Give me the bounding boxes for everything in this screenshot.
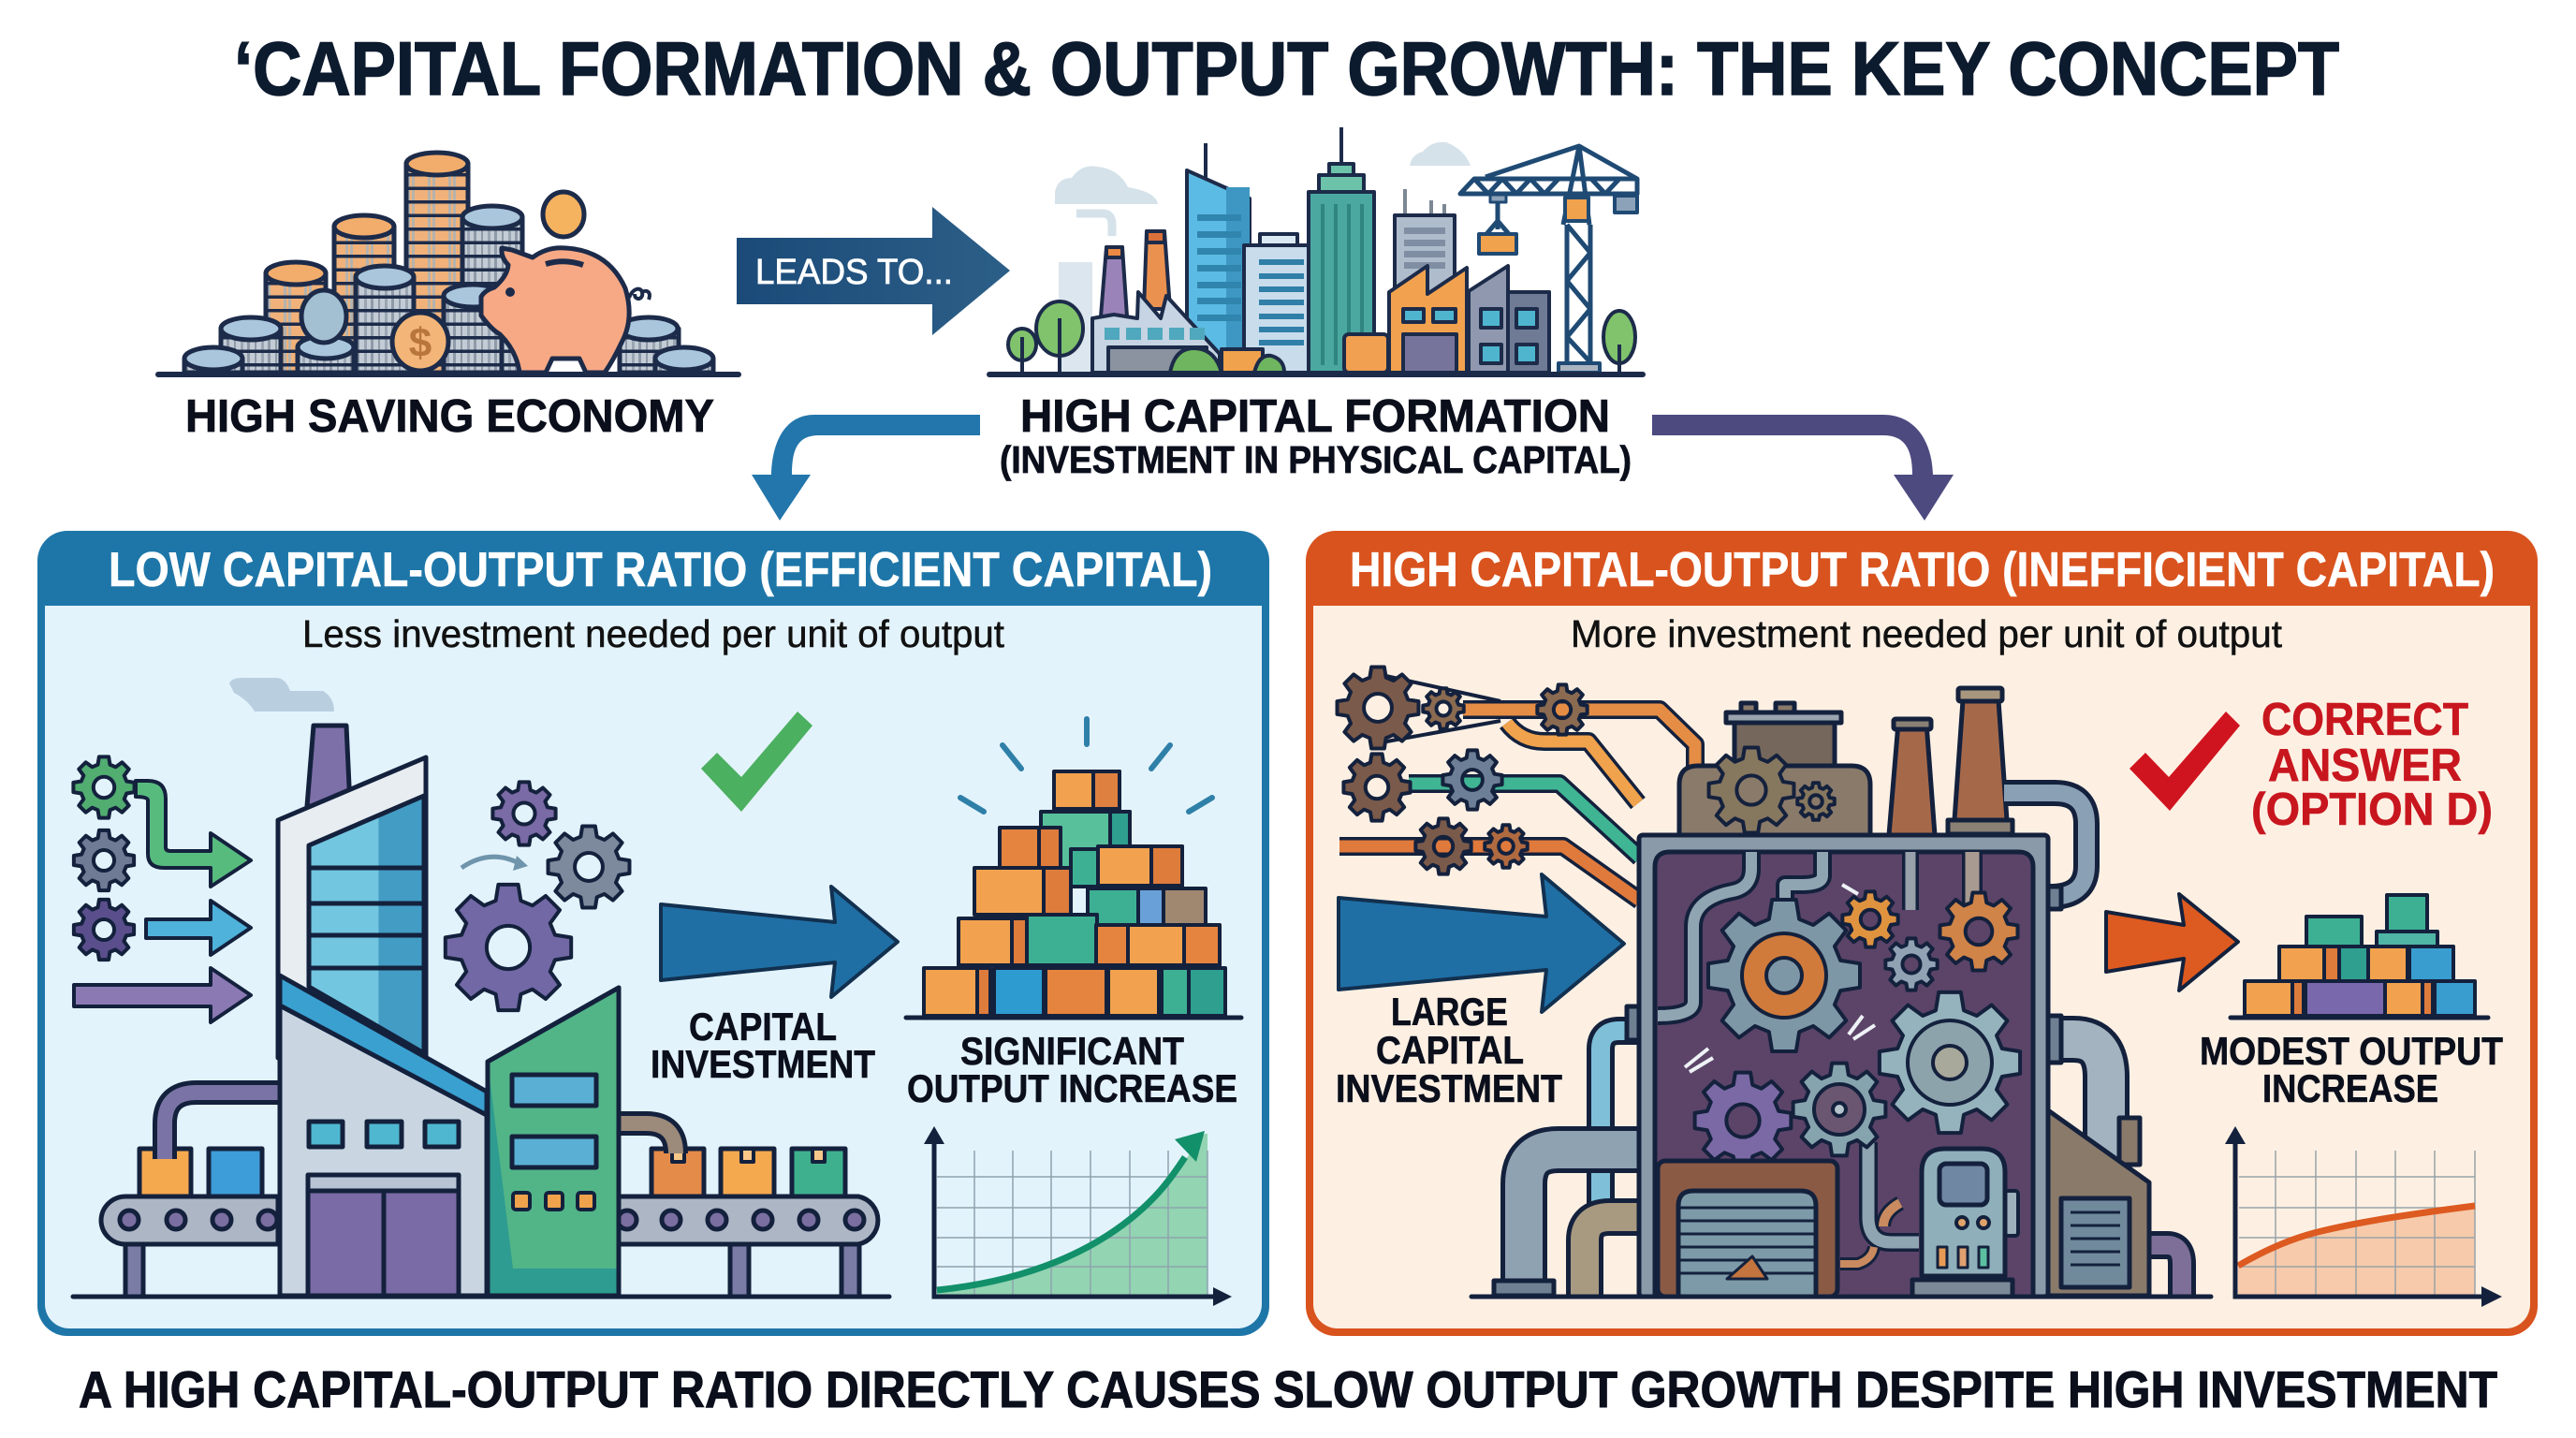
annex shed with vent xyxy=(2048,1110,2149,1296)
icon: green check xyxy=(701,712,812,812)
arrow: modest result xyxy=(2106,894,2238,990)
arrow: to high ratio panel xyxy=(1652,415,1954,521)
label: high capital formation: (INVESTMENT IN PHYSICAL CAPITAL) xyxy=(1000,438,1632,481)
clouds and smoke xyxy=(1055,142,1471,373)
icon: red check xyxy=(2130,712,2240,811)
chimney xyxy=(307,726,350,806)
callout: correct answer: (OPTION D) xyxy=(2251,785,2493,835)
ground line xyxy=(989,372,1643,377)
icon: large pile of boxes xyxy=(906,719,1241,1018)
control unit xyxy=(1912,1149,2018,1297)
label: capital investment: CAPITAL xyxy=(689,1005,837,1049)
arrow label: LEADS TO... xyxy=(755,253,953,292)
ground line xyxy=(73,1294,889,1299)
boxes on conveyor xyxy=(139,1149,845,1196)
gold dollar coin xyxy=(392,313,448,371)
coin stack small xyxy=(298,336,354,373)
label: modest output increase xyxy=(2200,1029,2503,1110)
glass tower xyxy=(1187,143,1250,373)
coin stack lowest right xyxy=(655,347,713,373)
label: significant output increase xyxy=(907,1029,1237,1110)
windows xyxy=(309,1122,459,1147)
efficient factory xyxy=(73,726,889,1297)
label: significant output increase: SIGNIFICANT xyxy=(960,1029,1184,1073)
machine frame xyxy=(1639,835,2048,1297)
label: large capital investment: LARGE xyxy=(1391,990,1508,1034)
tower xyxy=(278,757,426,1058)
icon: city skyline with factory and crane xyxy=(989,127,1643,374)
cloud xyxy=(229,678,334,712)
panel: low capital-output ratio xyxy=(37,531,1269,1336)
inner gears xyxy=(1695,891,2020,1168)
main building xyxy=(280,1005,487,1296)
panel: high capital-output ratio xyxy=(1306,531,2538,1336)
chimneys xyxy=(1101,231,1170,316)
construction crane xyxy=(1460,146,1637,373)
office block xyxy=(1244,234,1310,373)
spinning gears xyxy=(446,782,629,1010)
teal tower xyxy=(1309,127,1374,373)
coin stack orange mid xyxy=(334,215,394,373)
label: significant output increase: OUTPUT INCREASE xyxy=(907,1066,1237,1110)
chart: steep output growth xyxy=(924,1126,1232,1306)
arrow: large capital investment xyxy=(1339,874,1624,1012)
arrow: leads to xyxy=(737,207,1010,335)
label: large capital investment xyxy=(1336,990,1562,1110)
label: high capital formation xyxy=(1000,391,1632,481)
blue roof band xyxy=(280,976,487,1115)
right pipes xyxy=(2004,793,2182,1297)
coin stack silver centre xyxy=(356,266,414,373)
label: capital investment: INVESTMENT xyxy=(651,1042,875,1086)
coin stack right xyxy=(620,317,679,373)
ground line xyxy=(158,372,739,377)
tangled input pipes and gears xyxy=(1338,668,1695,901)
inner pipes xyxy=(1658,852,1972,1264)
callout: correct answer xyxy=(2251,695,2493,835)
left pipes xyxy=(1524,1031,1638,1297)
ground line xyxy=(1471,1294,2211,1299)
inefficient machine xyxy=(1471,688,2211,1297)
label: modest output increase: MODEST OUTPUT xyxy=(2200,1029,2503,1073)
upright silver coin xyxy=(301,290,346,343)
cracks xyxy=(1685,885,1875,1072)
gray factory xyxy=(1469,266,1549,373)
coin stack silver back xyxy=(462,206,522,373)
callout: correct answer: ANSWER xyxy=(2268,741,2462,791)
factory left xyxy=(1092,292,1220,373)
roll-up door xyxy=(1658,1161,1837,1297)
shrubs and crate xyxy=(1170,348,1284,373)
pipes xyxy=(165,1093,676,1159)
label: large capital investment: INVESTMENT xyxy=(1336,1066,1562,1110)
coin stack lowest left xyxy=(184,347,242,373)
label: large capital investment: CAPITAL xyxy=(1376,1028,1524,1072)
tank on top xyxy=(1679,703,1870,835)
falling coin xyxy=(543,192,584,237)
icon: coin stacks and piggy bank xyxy=(158,153,739,374)
subtitle: Less investment needed per unit of output xyxy=(302,612,1005,655)
panel heading: LOW CAPITAL-OUTPUT RATIO (EFFICIENT CAPITAL) xyxy=(109,543,1212,597)
chimneys xyxy=(1889,688,2012,835)
coin stack silver front xyxy=(444,285,502,373)
input gears and arrows xyxy=(73,756,251,1022)
subtitle: More investment needed per unit of output xyxy=(1571,612,2283,655)
label: capital investment xyxy=(651,1005,875,1086)
title: ‘CAPITAL FORMATION & OUTPUT GROWTH: THE KEY CONCEPT xyxy=(234,27,2339,111)
label: modest output increase: INCREASE xyxy=(2262,1066,2438,1110)
conveyor belts xyxy=(101,1196,878,1297)
gray highrise xyxy=(1395,189,1455,318)
door xyxy=(308,1175,459,1296)
coin stack orange left xyxy=(266,262,326,373)
orange factory xyxy=(1344,266,1467,373)
callout: correct answer: CORRECT xyxy=(2261,695,2468,745)
coin stack tall xyxy=(406,153,468,373)
label: high capital formation: HIGH CAPITAL FORMATION xyxy=(1020,391,1610,442)
arrow: to low ratio panel xyxy=(752,415,980,521)
gold dollar coin: $ xyxy=(409,320,432,366)
piggy bank xyxy=(481,248,650,373)
chart: flat output growth xyxy=(2225,1126,2502,1307)
icon: small pile of boxes xyxy=(2231,895,2488,1018)
label: high saving economy: HIGH SAVING ECONOMY xyxy=(185,391,714,442)
green building xyxy=(488,988,619,1296)
coin stack low left xyxy=(221,317,281,373)
arrow: capital investment xyxy=(661,887,898,997)
trees xyxy=(1008,301,1635,373)
